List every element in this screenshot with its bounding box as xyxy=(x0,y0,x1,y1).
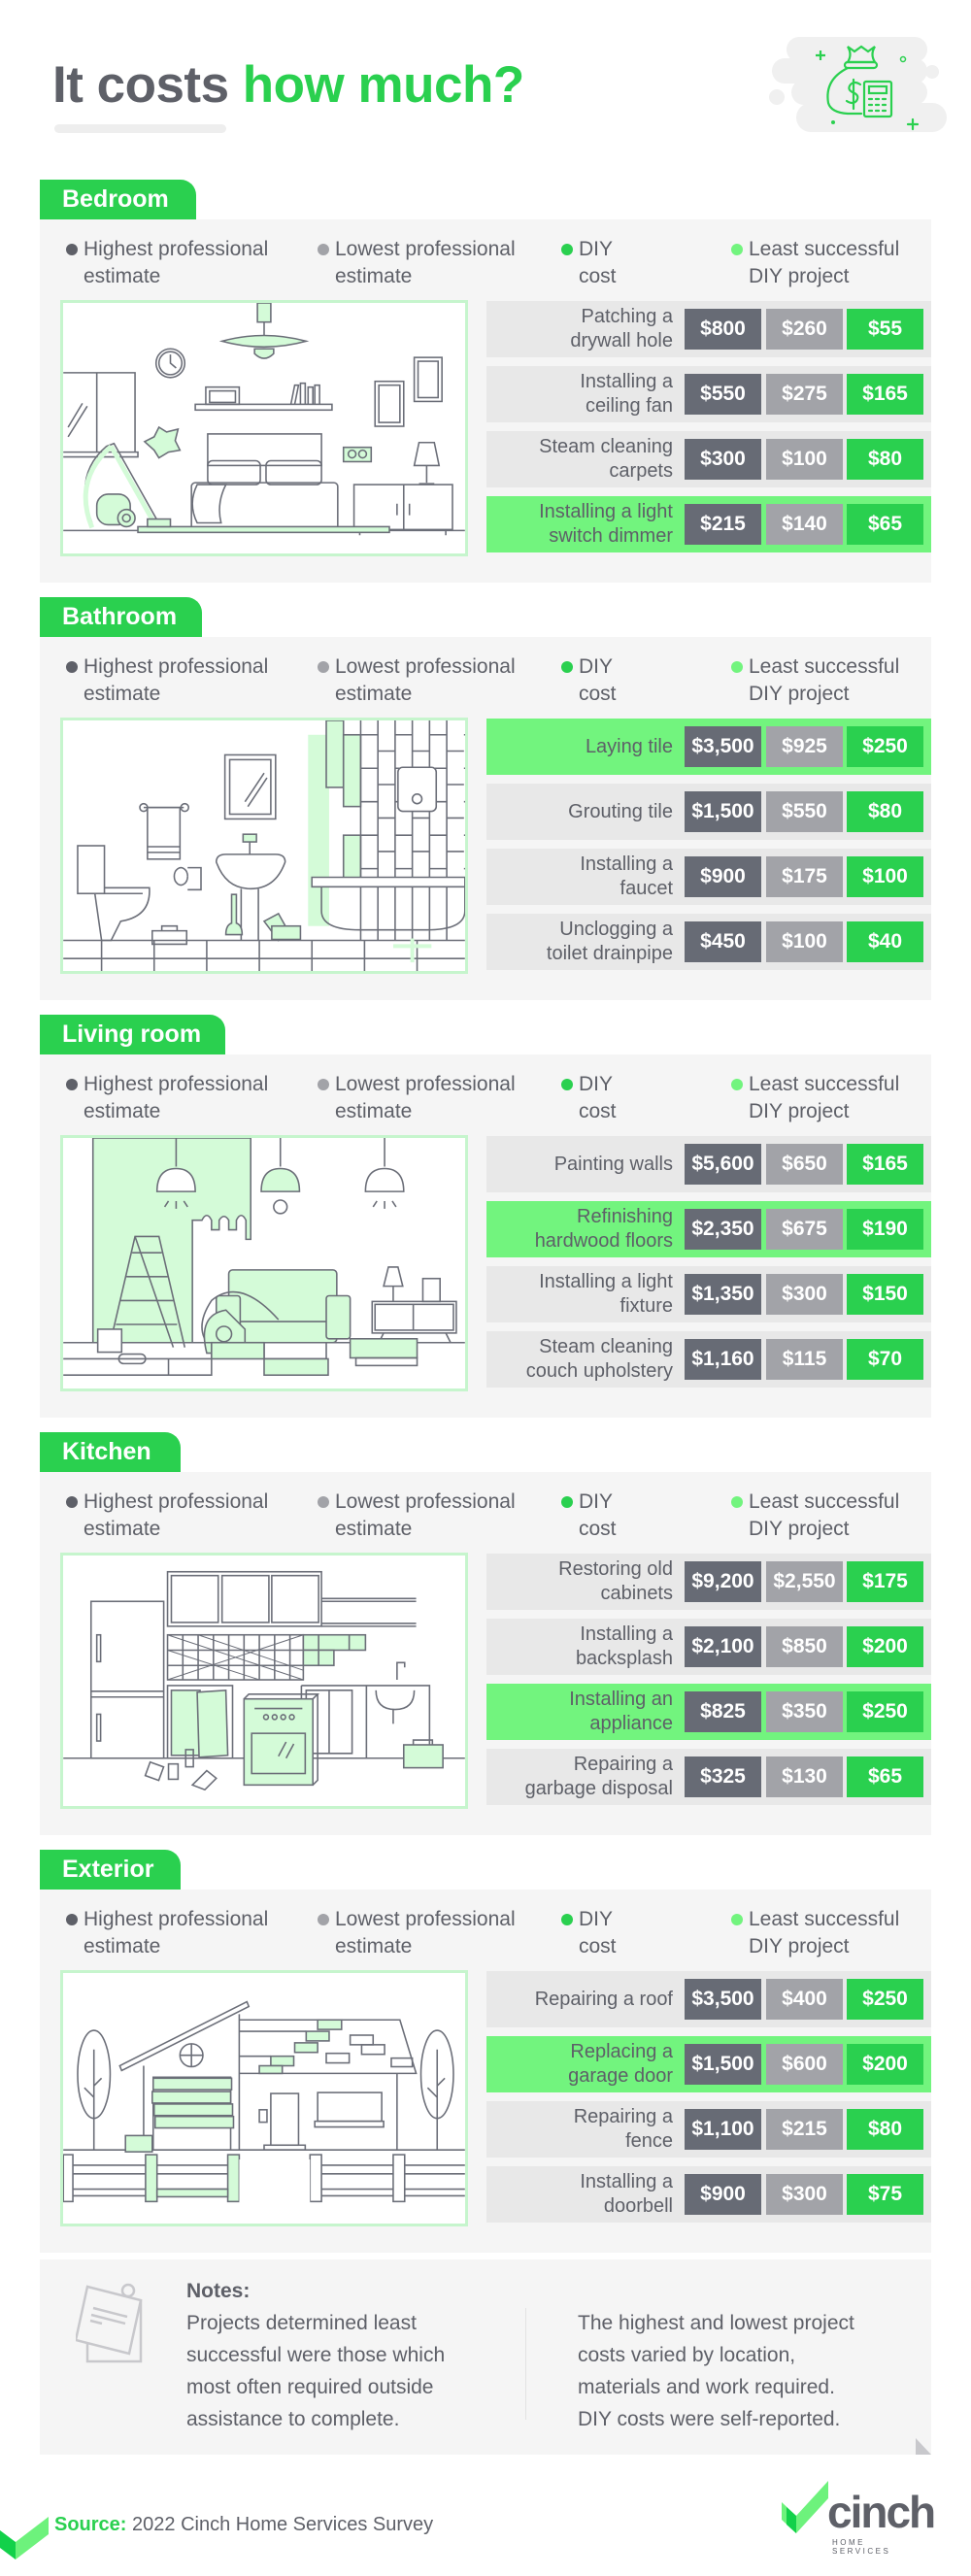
notes text column 2: costs varied by location, xyxy=(578,2344,795,2366)
row: faucet xyxy=(486,849,931,905)
legend: DIY: cost xyxy=(579,683,617,705)
row: patching drywall hole: $800 xyxy=(700,318,746,340)
legend: least successful: DIY project xyxy=(749,1935,849,1957)
legend: least successful: DIY project xyxy=(749,1100,849,1122)
row: backsplash xyxy=(486,1619,931,1675)
row: refinishing hardwood floors (least successful): $190 xyxy=(862,1218,908,1240)
title: It costs how much? xyxy=(52,56,524,114)
row: fence: $1,100 xyxy=(691,2118,754,2140)
row: couch upholstery: $1,160 xyxy=(691,1348,754,1370)
icon: pinned note xyxy=(76,2284,142,2363)
legend: highest: Highest professional xyxy=(84,238,268,260)
row: laying tile (least successful): Laying tile xyxy=(586,736,673,757)
row: doorbell: $75 xyxy=(868,2183,902,2205)
row: backsplash: $200 xyxy=(862,1635,908,1657)
tab: Exterior xyxy=(40,1850,181,1890)
legend: highest xyxy=(66,238,268,287)
tab: Bedroom xyxy=(40,180,196,219)
row: refinishing hardwood floors (least successful): $675 xyxy=(782,1218,827,1240)
legend: DIY: cost xyxy=(579,1100,617,1122)
legend: lowest: estimate xyxy=(335,1100,412,1122)
legend: DIY xyxy=(561,655,617,705)
row: laying tile (least successful): $3,500 xyxy=(691,735,754,757)
row: patching drywall hole: Patching a xyxy=(581,306,673,327)
legend: DIY: DIY xyxy=(579,1490,613,1513)
row: grouting tile xyxy=(486,784,931,840)
row: doorbell: doorbell xyxy=(604,2195,673,2217)
row: garbage disposal xyxy=(486,1749,931,1805)
row: restoring old cabinets xyxy=(486,1554,931,1610)
legend: least successful: Least successful xyxy=(749,238,899,260)
row: appliance (least successful): Installing an xyxy=(569,1689,673,1710)
tab: Bathroom: Bathroom xyxy=(62,603,177,630)
row: restoring old cabinets: $175 xyxy=(862,1570,908,1592)
legend: lowest xyxy=(318,1490,516,1540)
row: ceiling fan: $165 xyxy=(862,383,908,405)
row: faucet: faucet xyxy=(620,878,673,899)
legend: lowest xyxy=(318,1073,516,1122)
legend: highest: Highest professional xyxy=(84,1908,268,1930)
row: grouting tile: $1,500 xyxy=(691,800,754,822)
row: patching drywall hole: drywall hole xyxy=(570,330,673,351)
legend: lowest: estimate xyxy=(335,1518,412,1540)
row: restoring old cabinets: Restoring old xyxy=(558,1558,673,1580)
row: backsplash: $850 xyxy=(782,1635,827,1657)
tab: Bathroom xyxy=(40,597,202,637)
row: restoring old cabinets: cabinets xyxy=(600,1583,673,1604)
row: toilet drainpipe xyxy=(486,914,931,970)
icon: money bag and calculator xyxy=(769,37,947,132)
tab: Living room: Living room xyxy=(62,1020,201,1048)
legend: DIY: DIY xyxy=(579,238,613,260)
panel: exterior xyxy=(40,1890,931,2253)
legend: DIY xyxy=(561,1073,617,1122)
legend: highest xyxy=(66,1490,268,1540)
panel: notes xyxy=(40,2259,931,2455)
row: light fixture xyxy=(486,1266,931,1322)
notes text column 2 xyxy=(578,2312,854,2430)
row: couch upholstery: couch upholstery xyxy=(526,1360,673,1382)
logo: cinch: cinch xyxy=(827,2487,934,2537)
row: toilet drainpipe: Unclogging a xyxy=(559,919,673,940)
row: appliance (least successful): $350 xyxy=(782,1700,827,1723)
panel: bedroom xyxy=(40,219,931,583)
row: garage door (least successful) xyxy=(486,2036,931,2092)
tab: Living room xyxy=(40,1015,225,1054)
row: roof xyxy=(486,1971,931,2027)
row: backsplash: $2,100 xyxy=(691,1635,754,1657)
row: toilet drainpipe: toilet drainpipe xyxy=(547,943,673,964)
panel: bathroom xyxy=(40,637,931,1000)
row: steam cleaning carpets xyxy=(486,431,931,487)
row: roof: $250 xyxy=(862,1988,908,2010)
legend: least successful xyxy=(731,238,899,287)
illustration: living room xyxy=(60,1135,468,1391)
row: garage door (least successful): $1,500 xyxy=(691,2053,754,2075)
row: faucet: Installing a xyxy=(580,853,673,875)
notes text column 2: The highest and lowest project xyxy=(578,2312,854,2334)
row: garbage disposal: $130 xyxy=(782,1765,827,1788)
legend: highest: estimate xyxy=(84,683,160,705)
row: fence: Repairing a xyxy=(574,2106,673,2127)
row: backsplash: backsplash xyxy=(576,1648,673,1669)
row: ceiling fan: Installing a xyxy=(580,371,673,392)
row: grouting tile: Grouting tile xyxy=(568,800,673,821)
row: faucet: $900 xyxy=(700,865,746,887)
row: garbage disposal: garbage disposal xyxy=(525,1778,673,1799)
legend: lowest xyxy=(318,655,516,705)
row: garage door (least successful): Replacing a xyxy=(570,2041,673,2062)
row: garbage disposal: $65 xyxy=(868,1765,902,1788)
row: steam cleaning carpets: Steam cleaning xyxy=(539,436,673,457)
row: fence: $215 xyxy=(782,2118,827,2140)
page corner fold xyxy=(916,2438,931,2455)
legend: DIY: DIY xyxy=(579,1908,613,1930)
source: Source: 2022 Cinch Home Services Survey xyxy=(54,2514,433,2535)
row: patching drywall hole: $55 xyxy=(868,318,902,340)
row: light switch dimmer (least successful): $215 xyxy=(700,513,746,535)
row: restoring old cabinets: $2,550 xyxy=(773,1570,836,1592)
notes text column 2: DIY costs were self-reported. xyxy=(578,2408,840,2430)
panel: kitchen xyxy=(40,1472,931,1835)
row: appliance (least successful): appliance xyxy=(589,1713,673,1734)
legend: highest: estimate xyxy=(84,265,160,287)
row: light fixture: $150 xyxy=(862,1283,908,1305)
row: painting walls: $650 xyxy=(782,1153,827,1175)
legend: least successful: Least successful xyxy=(749,1073,899,1095)
row: faucet: $175 xyxy=(782,865,827,887)
row: garage door (least successful): $200 xyxy=(862,2053,908,2075)
legend: highest: Highest professional xyxy=(84,655,268,678)
row: steam cleaning carpets: carpets xyxy=(609,460,673,482)
row: light switch dimmer (least successful): switch dimmer xyxy=(549,525,673,547)
notes text column 1 xyxy=(186,2280,445,2430)
row: refinishing hardwood floors (least successful): hardwood floors xyxy=(535,1230,673,1252)
row: couch upholstery: $115 xyxy=(783,1348,826,1370)
legend: lowest: estimate xyxy=(335,683,412,705)
row: ceiling fan: ceiling fan xyxy=(586,395,673,417)
tab: Kitchen xyxy=(40,1432,181,1472)
title underline bar xyxy=(54,124,226,133)
legend: least successful xyxy=(731,1073,899,1122)
row: refinishing hardwood floors (least successful): $2,350 xyxy=(691,1218,754,1240)
notes text column 1: successful were those which xyxy=(186,2344,445,2366)
row: doorbell xyxy=(486,2166,931,2223)
legend: highest xyxy=(66,1073,268,1122)
legend: highest: estimate xyxy=(84,1100,160,1122)
row: roof: $3,500 xyxy=(691,1988,754,2010)
legend: highest: Highest professional xyxy=(84,1073,268,1095)
legend: lowest: Lowest professional xyxy=(335,655,516,678)
legend: least successful: DIY project xyxy=(749,683,849,705)
tab: Exterior: Exterior xyxy=(62,1856,153,1883)
legend: least successful: DIY project xyxy=(749,1518,849,1540)
tab: Kitchen: Kitchen xyxy=(62,1438,151,1465)
row: backsplash: Installing a xyxy=(580,1623,673,1645)
notes text column 1: Projects determined least xyxy=(186,2312,417,2334)
row: couch upholstery: $70 xyxy=(868,1348,902,1370)
legend: lowest: Lowest professional xyxy=(335,1908,516,1930)
legend: lowest: Lowest professional xyxy=(335,1490,516,1513)
row: refinishing hardwood floors (least successful): Refinishing xyxy=(577,1206,673,1227)
row: fence xyxy=(486,2101,931,2158)
legend: least successful: DIY project xyxy=(749,265,849,287)
legend: DIY xyxy=(561,238,617,287)
row: light fixture: $300 xyxy=(782,1283,827,1305)
row: garbage disposal: $325 xyxy=(700,1765,746,1788)
legend: DIY xyxy=(561,1490,617,1540)
legend: lowest: estimate xyxy=(335,1935,412,1957)
row: refinishing hardwood floors (least successful) xyxy=(486,1201,931,1257)
row: roof: Repairing a roof xyxy=(535,1989,673,2010)
legend: least successful: Least successful xyxy=(749,1908,899,1930)
row: light switch dimmer (least successful): $65 xyxy=(868,513,902,535)
legend: least successful xyxy=(731,1490,899,1540)
row: toilet drainpipe: $40 xyxy=(868,930,902,953)
legend: DIY: cost xyxy=(579,1518,617,1540)
legend: DIY: DIY xyxy=(579,1073,613,1095)
divider xyxy=(525,2308,526,2420)
legend: highest: Highest professional xyxy=(84,1490,268,1513)
row: roof: $400 xyxy=(782,1988,827,2010)
row: ceiling fan xyxy=(486,366,931,422)
row: toilet drainpipe: $450 xyxy=(700,930,746,953)
row: laying tile (least successful): $250 xyxy=(862,735,908,757)
notes text column 1: most often required outside xyxy=(186,2376,433,2398)
legend: DIY: cost xyxy=(579,265,617,287)
row: toilet drainpipe: $100 xyxy=(782,930,827,953)
legend: highest: estimate xyxy=(84,1935,160,1957)
row: light switch dimmer (least successful): Installing a light xyxy=(539,501,673,522)
legend: least successful xyxy=(731,1908,899,1957)
legend: least successful: Least successful xyxy=(749,655,899,678)
row: light fixture: $1,350 xyxy=(691,1283,754,1305)
row: laying tile (least successful): $925 xyxy=(782,735,827,757)
legend: lowest: Lowest professional xyxy=(335,1073,516,1095)
row: steam cleaning carpets: $100 xyxy=(782,448,827,470)
row: couch upholstery xyxy=(486,1331,931,1388)
notes text column 2: materials and work required. xyxy=(578,2376,835,2398)
legend: least successful: Least successful xyxy=(749,1490,899,1513)
row: faucet: $100 xyxy=(862,865,908,887)
row: doorbell: Installing a xyxy=(580,2171,673,2192)
row: light switch dimmer (least successful): $140 xyxy=(782,513,827,535)
legend: highest xyxy=(66,655,268,705)
row: ceiling fan: $550 xyxy=(700,383,746,405)
row: light fixture: fixture xyxy=(620,1295,673,1317)
logo: cinch xyxy=(782,2481,934,2556)
illustration: bathroom xyxy=(60,718,468,974)
row: fence: $80 xyxy=(868,2118,902,2140)
row: garbage disposal: Repairing a xyxy=(574,1754,673,1775)
row: laying tile (least successful) xyxy=(486,719,931,775)
tab: Bedroom: Bedroom xyxy=(62,185,169,213)
panel: living room xyxy=(40,1054,931,1418)
legend: highest: estimate xyxy=(84,1518,160,1540)
legend: least successful xyxy=(731,655,899,705)
logo: cinch: HOME SERVICES xyxy=(832,2538,890,2556)
icon: green chevron xyxy=(0,2517,49,2559)
row: garage door (least successful): $600 xyxy=(782,2053,827,2075)
legend: DIY xyxy=(561,1908,617,1957)
row: couch upholstery: Steam cleaning xyxy=(539,1336,673,1357)
legend: lowest xyxy=(318,238,516,287)
row: painting walls: $5,600 xyxy=(691,1153,754,1175)
row: appliance (least successful) xyxy=(486,1684,931,1740)
illustration: bedroom xyxy=(60,300,468,556)
row: steam cleaning carpets: $300 xyxy=(700,448,746,470)
row: patching drywall hole: $260 xyxy=(782,318,827,340)
row: appliance (least successful): $825 xyxy=(700,1700,746,1723)
legend: highest xyxy=(66,1908,268,1957)
legend: lowest: estimate xyxy=(335,265,412,287)
row: grouting tile: $550 xyxy=(782,800,827,822)
notes text column 1: assistance to complete. xyxy=(186,2408,399,2430)
row: garage door (least successful): garage door xyxy=(568,2065,673,2087)
row: steam cleaning carpets: $80 xyxy=(868,448,902,470)
row: grouting tile: $80 xyxy=(868,800,902,822)
row: light switch dimmer (least successful) xyxy=(486,496,931,552)
row: light fixture: Installing a light xyxy=(539,1271,673,1292)
legend: lowest xyxy=(318,1908,516,1957)
row: painting walls: $165 xyxy=(862,1153,908,1175)
notes text column 1: Notes: xyxy=(186,2280,250,2302)
legend: lowest: Lowest professional xyxy=(335,238,516,260)
row: doorbell: $900 xyxy=(700,2183,746,2205)
legend: DIY: cost xyxy=(579,1935,617,1957)
row: patching drywall hole xyxy=(486,301,931,357)
row: painting walls xyxy=(486,1136,931,1192)
row: fence: fence xyxy=(625,2130,673,2152)
illustration: exterior xyxy=(60,1970,468,2226)
row: appliance (least successful): $250 xyxy=(862,1700,908,1723)
row: doorbell: $300 xyxy=(782,2183,827,2205)
row: ceiling fan: $275 xyxy=(782,383,827,405)
illustration: kitchen xyxy=(60,1553,468,1809)
legend: DIY: DIY xyxy=(579,655,613,678)
row: painting walls: Painting walls xyxy=(554,1154,673,1175)
row: restoring old cabinets: $9,200 xyxy=(691,1570,754,1592)
